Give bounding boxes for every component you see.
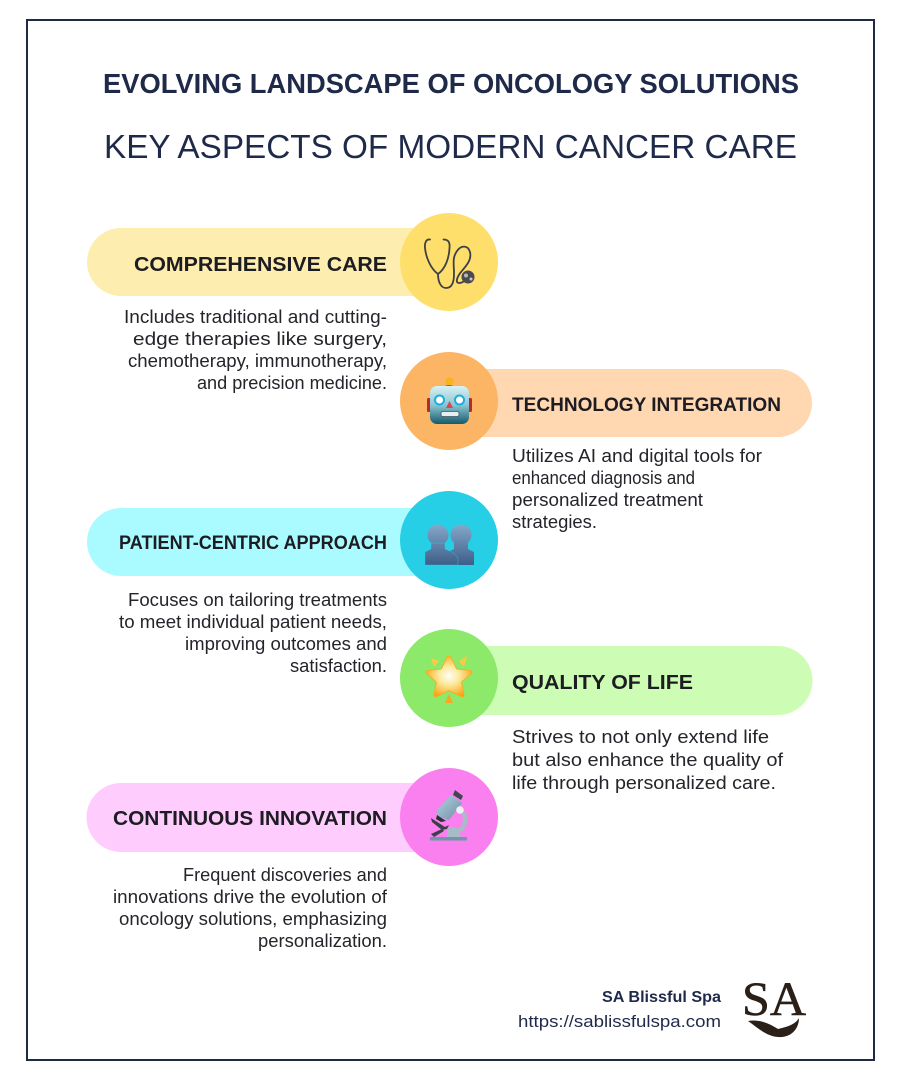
pill: technology integration [470, 369, 812, 437]
text: continuous innovation [113, 865, 388, 951]
text: comprehensive care: Includes traditional and cutting- [124, 307, 387, 327]
text: comprehensive care: edge therapies like surgery, [133, 329, 387, 349]
heading: patient-centric approach: PATIENT-CENTRIC APPROACH [119, 533, 387, 554]
text: patient-centric approach: Focuses on tailoring treatments [128, 590, 387, 610]
title: EVOLVING LANDSCAPE OF ONCOLOGY SOLUTIONS [103, 68, 799, 99]
text: continuous innovation: innovations drive the evolution of [113, 887, 388, 907]
icon: glowing star [426, 656, 472, 703]
text: quality of life: Strives to not only extend life [512, 727, 769, 747]
icon: microscope [430, 790, 467, 840]
text: comprehensive care: chemotherapy, immunotherapy, [128, 351, 387, 371]
footer: brand name: SA Blissful Spa [602, 989, 721, 1006]
text: technology integration: personalized treatment [512, 490, 703, 510]
panel: quality of life [400, 629, 813, 793]
logo: SA leaf: SA [742, 973, 806, 1026]
icon circle: yellow [400, 213, 498, 311]
text: technology integration [512, 446, 762, 532]
heading: technology integration: TECHNOLOGY INTEGRATION [512, 394, 781, 416]
text: patient-centric approach: improving outcomes and [185, 634, 387, 654]
panel: patient-centric approach [87, 491, 498, 676]
text: technology integration: enhanced diagnosis and [512, 468, 695, 488]
text: technology integration: strategies. [512, 512, 597, 532]
heading: comprehensive care: COMPREHENSIVE CARE [134, 253, 387, 276]
icon: robot [427, 377, 472, 424]
text: technology integration: Utilizes AI and digital tools for [512, 446, 762, 466]
icon circle: green [400, 629, 498, 727]
text: comprehensive care: and precision medicine. [197, 373, 387, 393]
icon circle: orange [400, 352, 498, 450]
text: quality of life: but also enhance the quality of [512, 750, 784, 770]
text: patient-centric approach: to meet individual patient needs, [119, 612, 387, 632]
panel: continuous innovation [87, 768, 498, 951]
icon circle: cyan [400, 491, 498, 589]
heading: continuous innovation: CONTINUOUS INNOVATION [113, 808, 387, 830]
text: patient-centric approach [119, 590, 387, 676]
pill: patient-centric approach [87, 508, 430, 576]
icon circle: pink [400, 768, 498, 866]
text: quality of life: life through personalized care. [512, 773, 776, 793]
panel: comprehensive care [87, 213, 498, 393]
pill: quality of life [470, 646, 813, 715]
text: continuous innovation: oncology solutions, emphasizing [119, 909, 387, 929]
icon: stethoscope [425, 239, 474, 288]
heading: quality of life: QUALITY OF LIFE [512, 671, 693, 694]
panel: technology integration [400, 352, 812, 532]
text: comprehensive care [124, 307, 387, 393]
subtitle: KEY ASPECTS OF MODERN CANCER CARE [104, 128, 797, 165]
icon: two people [425, 524, 474, 565]
text: continuous innovation: personalization. [258, 931, 387, 951]
pill: continuous innovation [87, 783, 430, 852]
text: quality of life [512, 727, 784, 793]
text: patient-centric approach: satisfaction. [290, 656, 387, 676]
pill: comprehensive care [87, 228, 430, 296]
text: continuous innovation: Frequent discoveries and [183, 865, 387, 885]
footer: url: https://sablissfulspa.com [518, 1012, 721, 1031]
